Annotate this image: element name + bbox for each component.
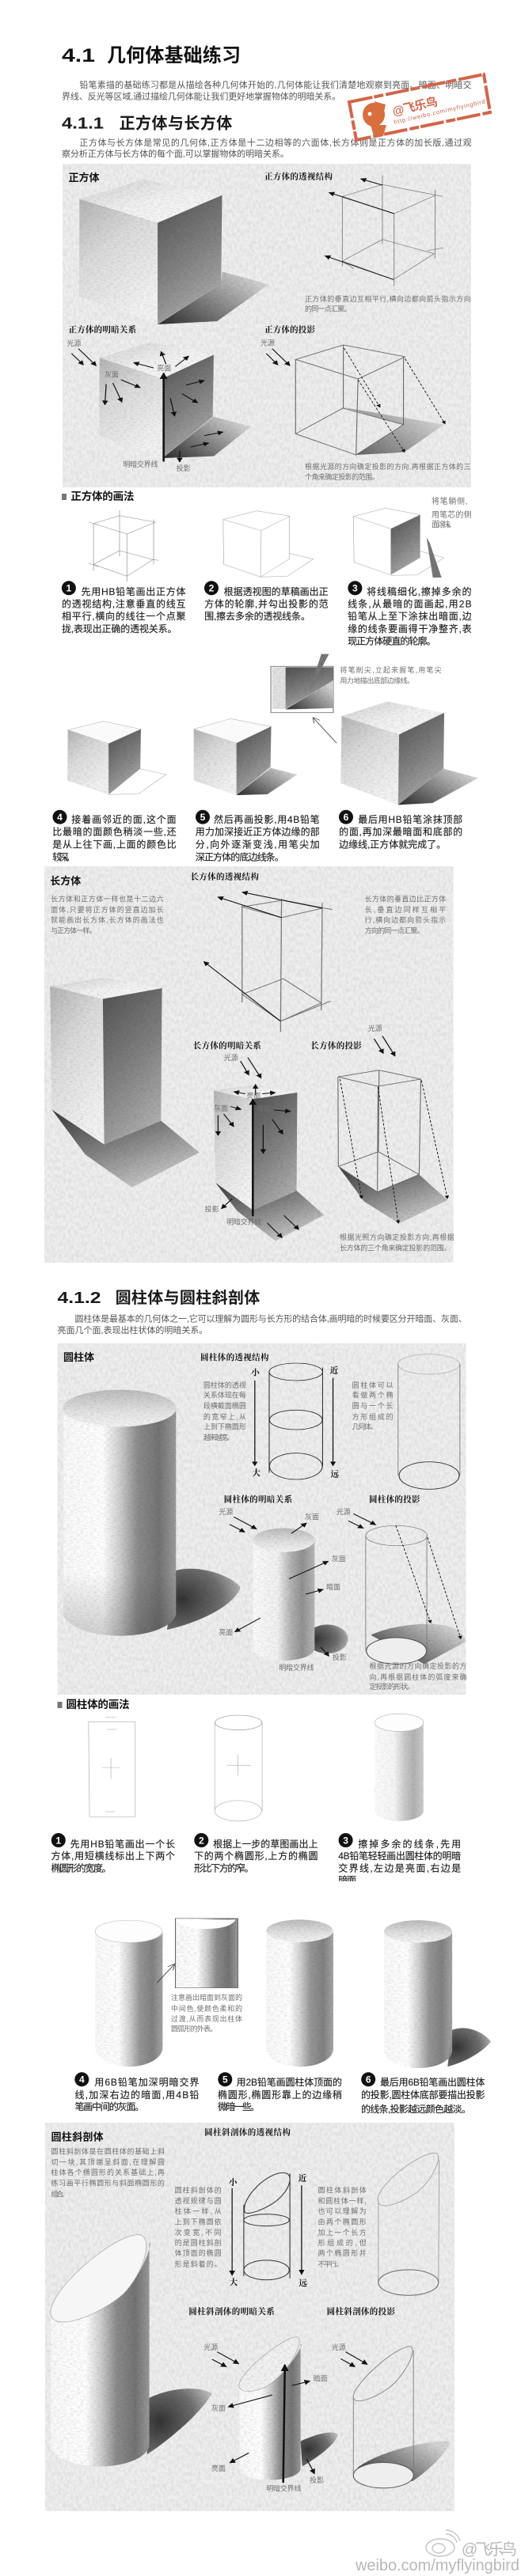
panel text: 大 — [252, 1468, 261, 1478]
panel text: 练习画平行椭圆形与斜面椭圆形的 — [51, 2179, 165, 2187]
panel text: 段横截面椭圆 — [203, 1401, 246, 1410]
step 3: 3 — [352, 582, 358, 593]
step 4: 是从上往下画,上面的颜色比 — [52, 839, 177, 850]
step 3 — [338, 1833, 461, 1886]
panel text: 灰面 — [105, 370, 119, 379]
step 6: 的线条,投影越远颜色越淡。 — [361, 2103, 471, 2115]
panel text: 光源 — [337, 1507, 351, 1516]
panel text: 柱体一样,从 — [175, 2207, 222, 2215]
step 3: 将线稿细化,擦掉多余的 — [367, 585, 472, 597]
panel text: 根据光源的方向确定投影的方向,再根据正方体的三 — [305, 462, 471, 471]
cuboid drawings — [50, 892, 447, 1241]
arrow to inset — [157, 1964, 174, 1983]
step 5: 用2B铅笔画圆柱体顶面的 — [237, 2076, 342, 2088]
panel text: 暗面 — [167, 383, 181, 392]
panel text: 远 — [331, 1469, 340, 1479]
watermark: @飞乐鸟 — [462, 2540, 517, 2559]
panel text: 圆柱体的透视结构 — [200, 1352, 269, 1362]
panel text: 根据光照方向确定投影方向,再根据 — [340, 1233, 454, 1241]
sketch 1 — [89, 1717, 135, 1816]
step 6: 的投影,圆柱体底部要描出投影 — [361, 2089, 485, 2101]
heading: cube method: 正方体的画法 — [70, 490, 134, 502]
panel text: 圆柱斜剖体的投影 — [326, 2306, 396, 2317]
panel text: 正方体的明暗关系 — [68, 324, 137, 335]
panel text: 长方体的投影 — [310, 1040, 362, 1051]
panel text: 大 — [230, 2277, 238, 2287]
note: pencil side: 面涂抹。 — [432, 520, 456, 530]
panel text: 看做两个椭 — [352, 1391, 393, 1400]
panel text: 和圆柱体一样, — [318, 2196, 367, 2205]
step 6 — [361, 2072, 485, 2115]
step 1: 先用HB铅笔画出一个长 — [70, 1838, 175, 1850]
panel text: 长方体的三个角来确定投影的范围。 — [340, 1244, 451, 1252]
heading 4.1.2 — [57, 1289, 260, 1307]
panel text: 圆柱斜剖体 — [51, 2131, 104, 2143]
panel text: 近 — [330, 1366, 339, 1376]
shaded cube with arrows — [71, 343, 251, 462]
step 4: 4 — [79, 2074, 85, 2085]
wire cube with shadow — [266, 345, 445, 455]
arrow to inset — [314, 718, 337, 743]
sketch 3 — [353, 508, 444, 578]
panel text: 小 — [251, 1368, 260, 1377]
panel text: 灰面 — [332, 1554, 346, 1563]
panel text: 与正方体一样。 — [51, 926, 97, 935]
step 6: 最后用HB铅笔涂抹顶部 — [358, 813, 462, 825]
panel text: 光源 — [224, 1053, 238, 1062]
panel text: 也可以理解为 — [318, 2207, 367, 2215]
step 1 — [62, 581, 186, 635]
intro text — [62, 79, 472, 102]
heading 4.1.1: 正方体与长方体 — [120, 114, 232, 133]
cube drawings — [71, 176, 445, 462]
title: 几何体基础练习 — [107, 45, 241, 66]
panel text: 形是斜着的。 — [175, 2260, 222, 2268]
panel text: 根据光源的方向确定投影的方 — [369, 1661, 467, 1670]
panel text: 不平行。 — [318, 2260, 343, 2268]
panel text: 明暗交界线 — [226, 1218, 261, 1226]
icon: weibo logo — [426, 2530, 460, 2556]
panel text: 圆柱体的明暗关系 — [224, 1494, 293, 1504]
step 6: 边缘线,正方体就完成了。 — [339, 839, 446, 850]
step 2: 2 — [199, 1835, 204, 1846]
step 5: 然后再画投影,用4B铅笔 — [214, 813, 320, 825]
step 1: 1 — [67, 582, 72, 593]
oblique perspective — [232, 2173, 302, 2280]
panel text: 正方体的垂直边互相平行,横向边都向箭头指示方向 — [305, 294, 471, 303]
step 1: 拢,表现出正确的透视关系。 — [62, 623, 177, 635]
oblique shaded — [212, 2337, 338, 2483]
step 4 — [74, 2072, 199, 2112]
oblique wire right — [378, 2153, 439, 2295]
stamp text: http://weibo.com/myflyingbird — [393, 98, 485, 126]
panel text: 形组成的,但 — [318, 2238, 367, 2247]
big cylinder — [63, 1390, 241, 1636]
panel text: 亮面 — [246, 1091, 260, 1100]
panel text: 光源 — [260, 339, 275, 347]
panel text: 光源 — [203, 2343, 218, 2351]
panel text: 近 — [299, 2173, 307, 2184]
panel text: 圆柱体的透视 — [203, 1381, 246, 1389]
step 4: 4 — [57, 812, 63, 823]
step 5: 用力加深接近正方体边缘的部 — [196, 826, 320, 838]
step 5: 深正方体的底边线条。 — [196, 851, 284, 862]
panel text: 圆与一个长 — [352, 1401, 393, 1410]
step 3: 缘的线条要画得干净整齐,表 — [348, 623, 472, 635]
big oblique cylinder — [51, 2235, 212, 2467]
panel text: 越来越宽。 — [203, 1433, 234, 1441]
panel text: 柱体各个椭圆形的关系基础上,再 — [51, 2168, 165, 2176]
panel text — [50, 871, 454, 1252]
watermark: weibo.com/myflyingbird — [355, 2557, 519, 2574]
panel text: 小 — [229, 2177, 238, 2187]
step 5: 椭圆形,椭圆形靠上的边缘稍 — [218, 2089, 342, 2101]
heading: cylinder method: 圆柱体的画法 — [67, 1698, 130, 1710]
step 5: 5 — [200, 812, 206, 823]
step 6: 最后用6B铅笔画出圆柱体 — [380, 2076, 485, 2088]
step 3: 擦掉多余的线条,先用 — [358, 1838, 461, 1850]
inset detail — [271, 654, 333, 713]
step 2 — [204, 581, 329, 622]
body text 4.1.2: 亮面几个面,表现出柱状体的明暗关系。 — [57, 1324, 207, 1335]
inset detail — [175, 1919, 238, 1988]
cuboid wire with shadow — [338, 1036, 447, 1223]
panel text: 圆柱斜剖体是在圆柱体的基础上斜 — [51, 2147, 165, 2156]
panel text: 组合。 — [51, 2189, 68, 2198]
panel text: 投影 — [177, 464, 191, 472]
panel text: 长方体的垂直边比正方体 — [365, 894, 446, 903]
step 3: 3 — [343, 1835, 348, 1846]
body text 4.1.2 — [57, 1313, 467, 1335]
panel text: 关系体现在每 — [203, 1391, 246, 1400]
step 2: 2 — [209, 582, 215, 593]
step 6: 的面,再加深最暗面和底部的 — [339, 826, 462, 838]
panel text: 远 — [299, 2278, 307, 2288]
panel text: 投影 — [310, 2476, 324, 2484]
step 5 — [218, 2072, 342, 2112]
panel text: 正方体 — [68, 172, 100, 184]
cylinder drawings — [63, 1354, 466, 1664]
panel text: 光源 — [67, 339, 81, 347]
step 5: 微暗一些。 — [218, 2101, 260, 2112]
step 1: 方体,用短横线标出上下两个 — [51, 1850, 175, 1862]
panel text: 圆柱体斜剖体 — [318, 2185, 367, 2195]
cuboid shaded — [214, 1058, 324, 1241]
cylinder wire with shadow — [348, 1513, 466, 1664]
panel text: 行,横向边都向箭头指示 — [365, 915, 446, 924]
panel text: 两个椭圆形并 — [318, 2248, 367, 2257]
heading 4.1.1: 4.1.1 — [62, 116, 104, 133]
stamp text: @飞乐鸟 — [391, 94, 439, 119]
panel text: 定投影的形状。 — [369, 1682, 414, 1691]
cylinder step 4 — [95, 1920, 162, 2066]
step 4: 比最暗的面颜色稍淡一些,还 — [52, 826, 177, 838]
note: pencil side: 将笔躺侧, — [432, 496, 467, 506]
panel text: 由两个椭圆形 — [318, 2217, 367, 2226]
note: pencil tip: 将笔削尖,立起来握笔,用笔尖 — [340, 665, 442, 674]
panel text: 向,再根据圆柱体的弧度来确 — [369, 1673, 467, 1681]
panel text: 的宽窄上,从 — [203, 1412, 246, 1421]
step 4: 线,加深右边的暗面,用4B铅 — [74, 2089, 199, 2101]
step 5: 分,向外逐渐变浅,用笔尖加 — [196, 839, 320, 850]
panel text: 透视规律与圆 — [175, 2196, 222, 2205]
panel: cuboid — [44, 866, 454, 1263]
panel text: 体顶面的椭圆 — [175, 2248, 222, 2257]
panel text: 亮面 — [157, 363, 171, 372]
panel text: 长,垂直边同样互相平 — [365, 905, 446, 914]
panel text: 明暗交界线 — [123, 460, 158, 468]
oblique wire with shadow — [340, 2347, 450, 2488]
cylinder perspective — [255, 1363, 333, 1479]
step 6 — [339, 810, 462, 850]
heading 4.1.2: 圆柱体与圆柱斜剖体 — [116, 1289, 260, 1307]
panel text: 暗面 — [314, 2373, 328, 2383]
panel text: 亮面 — [211, 2464, 226, 2472]
cube step 4 — [67, 722, 166, 794]
panel text: 圆柱斜剖体的明暗关系 — [188, 2306, 275, 2317]
step 4: 较深。 — [52, 851, 75, 862]
body text 4.1.1 — [62, 137, 472, 159]
note: pencil tip: 用力地描出底部边缘线。 — [340, 676, 414, 684]
oblique cylinder drawings — [51, 2153, 450, 2488]
panel text: 上到下椭圆形 — [203, 1422, 246, 1431]
panel text: 切一块,其顶端呈斜面,在理解圆 — [51, 2157, 165, 2166]
panel text: 光源 — [219, 1507, 233, 1516]
step 2: 形比下方的窄。 — [194, 1862, 253, 1873]
stamp character — [363, 101, 386, 136]
note: transition: 中间色,使颜色柔和的 — [171, 2004, 242, 2013]
sketch 3 — [375, 1714, 424, 1821]
note: transition: 圆弧形的外表。 — [171, 2025, 217, 2033]
panel text: 投影 — [333, 1653, 347, 1661]
perspective cube — [325, 176, 443, 286]
step 3 — [348, 581, 472, 646]
step 3: 4B铅笔轻轻画出圆柱体的明暗 — [338, 1850, 461, 1862]
panel text: 方向的同一点汇聚。 — [365, 926, 424, 935]
panel: cylinder — [57, 1343, 467, 1695]
cylinder shaded — [230, 1517, 348, 1661]
panel text: 就能画出长方体,长方体的画法也 — [51, 915, 164, 924]
step 1: 相平行,横向的线往一个点聚 — [62, 610, 185, 622]
panel text: 暗面 — [326, 1582, 340, 1591]
panel text: 圆柱体可以 — [352, 1381, 393, 1389]
panel text: 长方体 — [50, 875, 81, 887]
step 3: 线条,从最暗的面画起,用2B — [348, 598, 472, 610]
sketch 2 — [223, 511, 314, 577]
panel text: 长方体的明暗关系 — [193, 1040, 261, 1051]
panel text: 灰面 — [305, 1513, 319, 1521]
intro text: 铅笔素描的基础练习都是从描绘各种几何体开始的,几何体能让我们清楚地观察到亮面、暗面、明暗交 — [79, 79, 472, 90]
panel text: 灰面 — [214, 1104, 228, 1112]
cube step 5 — [194, 718, 297, 795]
step 1: 的透视结构,注意垂直的线互 — [62, 598, 185, 610]
panel text — [51, 2127, 396, 2493]
panel text: 的是圆柱斜剖 — [175, 2238, 222, 2247]
intro text: 界线、反光等区域,通过描绘几何体能让我们更好地掌握物体的明暗关系。 — [62, 91, 340, 102]
sketch 1 — [89, 510, 158, 581]
panel text: 的同一点汇聚。 — [305, 305, 352, 313]
panel text: 明暗交界线 — [279, 1663, 314, 1672]
panel text: 长方体的透视结构 — [190, 871, 259, 881]
panel text: 个角来确定投影的范围。 — [305, 472, 379, 481]
step 2: 根据上一步的草图画出上 — [213, 1838, 318, 1850]
panel text — [63, 1351, 467, 1691]
panel: oblique cylinder — [45, 2123, 454, 2511]
panel text: 圆柱体 — [63, 1351, 94, 1363]
panel text: 长方体和正方体一样也是十二边六 — [51, 894, 164, 903]
note: pencil side — [432, 496, 472, 530]
step 1: 椭圆形的宽度。 — [51, 1862, 111, 1873]
heading 4.1.2: 4.1.2 — [57, 1290, 101, 1307]
body text 4.1.1: 察分析正方体与长方体的每个面,可以掌握物体的明暗关系。 — [62, 148, 289, 159]
watermark — [355, 2530, 519, 2574]
cylinder step 6 — [384, 1920, 491, 2068]
step 2: 下的两个椭圆形,上方的椭圆 — [194, 1850, 318, 1862]
step 6: 6 — [344, 812, 349, 823]
panel text: 几何体。 — [352, 1422, 378, 1431]
step 1: 1 — [55, 1835, 61, 1846]
panel text: 暗面 — [257, 1104, 271, 1112]
note: transition: 注意画出暗面到灰面的 — [171, 1993, 242, 2002]
panel text: 上到下椭圆依 — [175, 2217, 222, 2226]
step 2: 围,擦去多余的透视线条。 — [204, 610, 310, 622]
panel text: 圆柱斜剖体的透视结构 — [204, 2127, 291, 2138]
step 6: 6 — [366, 2074, 371, 2085]
cylinder wire right — [398, 1354, 460, 1489]
sketch 2 — [215, 1715, 262, 1821]
cube step drawings — [67, 508, 478, 805]
panel text: 灰面 — [211, 2404, 226, 2412]
big cube — [79, 180, 269, 324]
cuboid perspective — [203, 892, 333, 1032]
panel: cube — [63, 164, 471, 487]
panel text: 次变宽,不同 — [175, 2228, 222, 2237]
step 2: 根据透视图的草稿画出正 — [224, 585, 329, 597]
panel text: 方形组成的 — [352, 1412, 393, 1421]
panel text: 圆柱体的投影 — [369, 1494, 420, 1504]
step 3: 交界线,左边是亮面,右边是 — [338, 1862, 461, 1873]
big cuboid — [50, 978, 200, 1188]
step 3: 现正方体硬直的轮廓。 — [348, 635, 435, 646]
panel text: 亮面 — [219, 1628, 233, 1637]
cylinder step drawings — [89, 1714, 491, 2068]
body text 4.1.1: 正方体与长方体是常见的几何体,正方体是十二边相等的六面体,长方体则是正方体的加长版,通过观 — [79, 137, 472, 148]
panel text: 光源 — [368, 1024, 382, 1032]
step 3: 暗面 — [338, 1873, 356, 1886]
cube step 6 — [340, 702, 478, 805]
panel text: 面体,只要将正方体的竖直边加长 — [51, 905, 164, 914]
step 5 — [196, 810, 320, 862]
panel text: 正方体的投影 — [264, 324, 315, 335]
note: pencil tip — [340, 665, 442, 684]
panel text: 光源 — [332, 2343, 346, 2351]
step 4: 笔画中间的灰面。 — [74, 2101, 144, 2112]
step 1 — [51, 1833, 175, 1873]
step 1: 先用HB铅笔画出正方体 — [81, 585, 185, 597]
step 4: 接着画邻近的面,这个面 — [71, 813, 177, 825]
step 5: 5 — [222, 2074, 228, 2085]
panel text: 投影 — [205, 1204, 219, 1213]
step 2 — [194, 1833, 318, 1873]
step 2: 方体的轮廓,并勾出投影的范 — [204, 598, 329, 610]
stamp — [349, 74, 490, 140]
panel text: 圆柱斜剖体的 — [175, 2185, 222, 2195]
panel text: 加上一个长方 — [318, 2228, 367, 2237]
step 3: 铅笔从上至下涂抹出暗面,边 — [348, 610, 472, 622]
note: transition: 过渡,从而表现出柱体 — [171, 2014, 242, 2023]
panel text: 正方体的透视结构 — [264, 172, 333, 182]
title: 4.1 — [62, 45, 95, 66]
step 4 — [52, 810, 177, 862]
step 4: 用6B铅笔加深明暗交界 — [94, 2076, 199, 2088]
note: transition — [171, 1993, 242, 2033]
body text 4.1.2: 圆柱体是最基本的几何体之一,它可以理解为圆形与长方形的结合体,画明暗的时候要区分开暗面、灰面、 — [74, 1313, 467, 1324]
note: pencil side: 用笔芯的侧 — [432, 510, 472, 520]
panel text — [67, 172, 471, 481]
cylinder step 5 — [266, 1919, 333, 2066]
heading 4.1.1 — [62, 114, 232, 133]
panel text: 明暗交界线 — [266, 2484, 301, 2493]
